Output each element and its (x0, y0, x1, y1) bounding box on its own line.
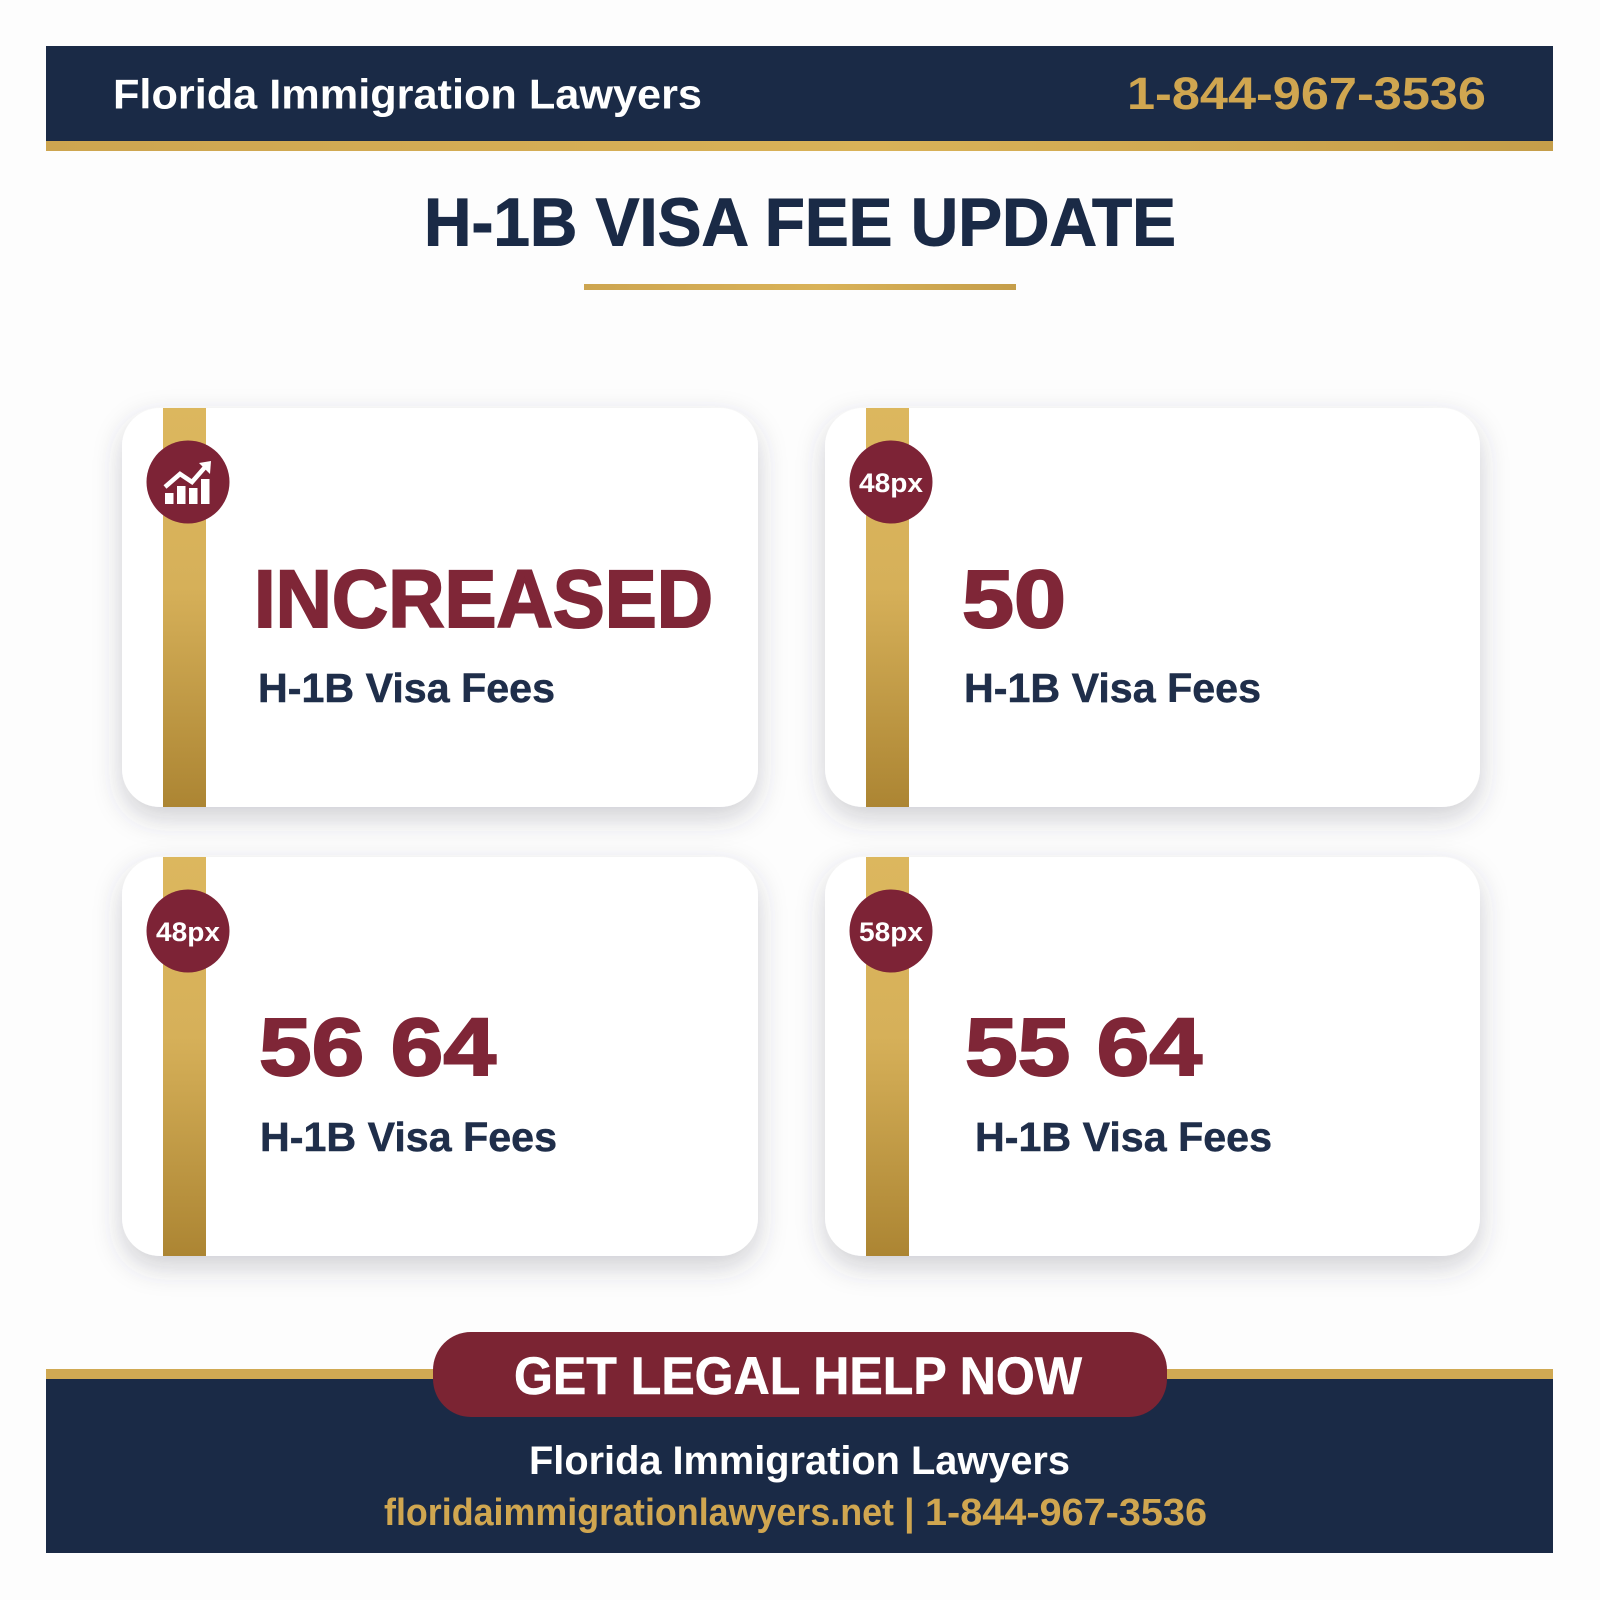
badge: 48px: 48px (859, 468, 923, 498)
value: 56 64: 56 64 (259, 1002, 496, 1093)
badge: 48px (146, 890, 230, 972)
footer website and phone: | (904, 1492, 915, 1534)
panel: increased card (122, 408, 758, 807)
label: H-1B Visa Fees (260, 1114, 557, 1160)
label: H-1B Visa Fees (964, 665, 1261, 711)
value: 50: 50 (962, 554, 1066, 645)
footer band (46, 1369, 1553, 1553)
label: H-1B Visa Fees (258, 665, 555, 711)
header firm name: Florida Immigration Lawyers (113, 70, 702, 118)
footer firm name: Florida Immigration Lawyers (529, 1439, 1070, 1483)
value: increased: INCREASED (254, 554, 713, 645)
badge: 48px (850, 440, 932, 524)
label: H-1B Visa Fees (975, 1114, 1272, 1160)
icon: rising bar chart (146, 440, 230, 524)
title: H-1B VISA FEE UPDATE (424, 184, 1176, 260)
badge: 58px: 58px (859, 917, 923, 947)
call to action pill: GET LEGAL HELP NOW (514, 1347, 1082, 1406)
footer website and phone (384, 1492, 1207, 1534)
badge: 48px: 48px (156, 917, 220, 947)
header phone number: 1-844-967-3536 (1127, 68, 1486, 119)
title underline (584, 284, 1016, 290)
panel: 55 64 card (825, 857, 1480, 1256)
panel: 56 64 card (122, 857, 758, 1256)
header bar (46, 46, 1553, 151)
panel: 50 card (825, 408, 1480, 807)
footer website and phone: floridaimmigrationlawyers.net (384, 1492, 894, 1534)
footer website and phone: 1-844-967-3536 (925, 1492, 1207, 1534)
value: 55 64: 55 64 (965, 1002, 1202, 1093)
badge: 58px (850, 890, 932, 972)
call to action pill (433, 1332, 1167, 1417)
